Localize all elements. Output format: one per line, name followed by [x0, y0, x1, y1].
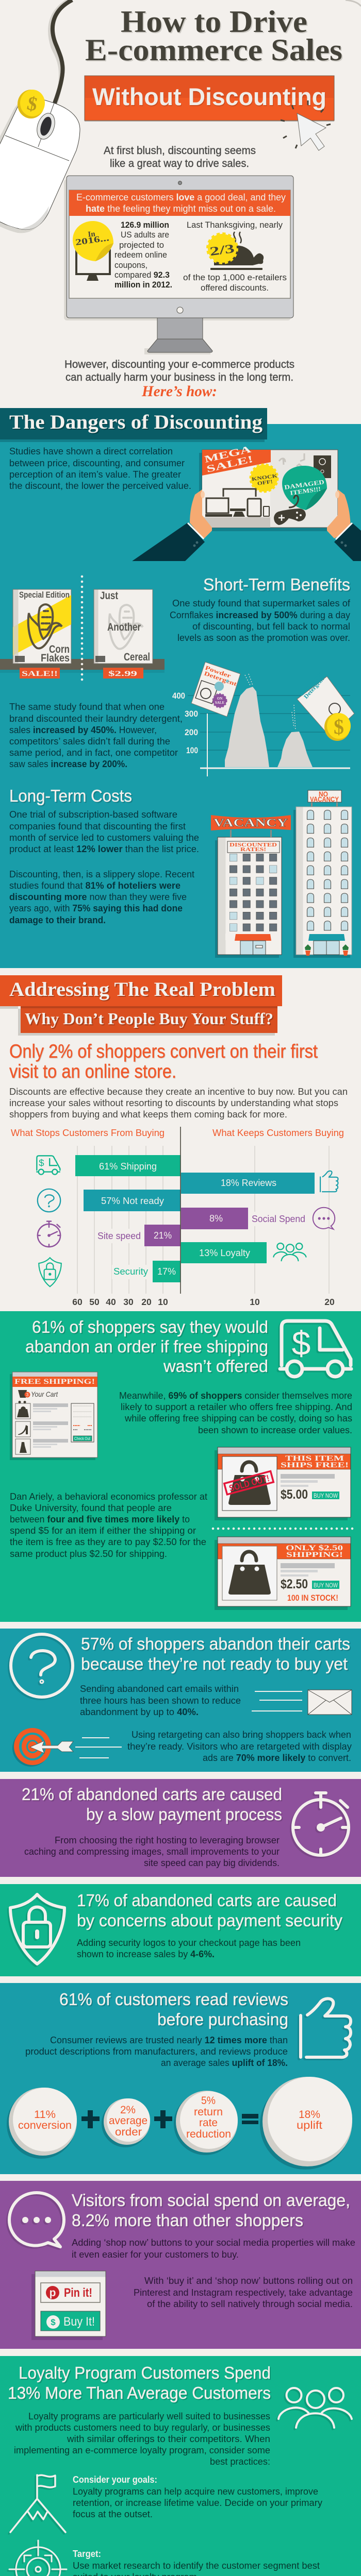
illustration: discount hotel	[211, 815, 291, 958]
illustration: full hotel: VACANCY	[310, 795, 339, 803]
transition text: can actually harm your business in the long term.	[65, 371, 293, 383]
button: pin it	[41, 2283, 100, 2302]
heading: real problem: Why Don’t People Buy Your Stuff?	[25, 1009, 273, 1028]
icon: mountain flag	[10, 2475, 65, 2532]
icon: coin: $	[334, 715, 344, 738]
stat: coupons: US adults are	[121, 230, 169, 240]
bar: loyalty	[181, 1242, 267, 1263]
text: shop now buttons: it even easier for your customers to buy.	[72, 2249, 239, 2260]
bar: security: 17%	[157, 1266, 176, 1277]
product card: ships free: BUY NOW	[314, 1492, 338, 1499]
stat: coupons: 126.9 million	[121, 221, 169, 230]
icon: people	[278, 2388, 352, 2428]
text: dan ariely: between four and five times more likely to	[10, 1514, 190, 1524]
headline: 17 percent	[77, 1891, 342, 1930]
text: 69 percent	[119, 1390, 352, 1435]
headline: social visitors: 8.2% more than other shoppers	[72, 2211, 303, 2230]
button: without discounting: Without Discounting	[92, 83, 326, 110]
chart: detergent sales: 200	[185, 727, 198, 737]
box: competitor detergent: Competitor	[298, 668, 325, 698]
text: laundry study	[9, 701, 183, 769]
text: software trial: product at least 12% lower than the list price.	[9, 843, 199, 854]
mockup: cart: FREE SHIPPING!	[14, 1378, 95, 1386]
text: discounts are effective	[9, 1086, 348, 1120]
stat: coupons: compared 92.3	[114, 270, 170, 280]
product card: ships free: $5.00	[281, 1487, 308, 1502]
text: laundry study: The same study found that when one	[9, 701, 165, 712]
text: software trial: month of service led to customers valuing the	[9, 832, 199, 843]
product card: paid shipping: SHIPPING!	[286, 1551, 343, 1559]
bar: site speed: Site speed	[97, 1231, 141, 1241]
bubble: return rate reduction: 5%	[201, 2095, 216, 2107]
text: site speed: caching and compressing images, small improvements to your	[24, 1846, 280, 1857]
illustration: hands holding sale magazine	[133, 444, 361, 561]
box: competitor detergent	[297, 668, 354, 737]
text: native selling	[134, 2275, 353, 2309]
mockup: social buttons	[31, 2271, 106, 2340]
text: discounts are effective: Discounts are effective because they create an incentive to buy now. But you can	[9, 1086, 348, 1097]
bubble: return rate reduction: rate	[199, 2117, 218, 2129]
monitor headline: E-commerce customers love a good deal, and they	[76, 192, 286, 202]
box: powder detergent: SALE	[215, 701, 224, 705]
bubble: average order: order	[115, 2126, 142, 2138]
title: How to Drive	[121, 5, 307, 39]
chart titles	[11, 1127, 344, 1138]
icon: question mark	[11, 1634, 73, 1697]
transition text: However, discounting your e-commerce products	[64, 359, 294, 370]
text: consider your goals: Consider your goals:	[73, 2474, 157, 2485]
axis labels	[72, 1297, 335, 1307]
text: dan ariely: Dan Ariely, a behavioral economics professor at	[10, 1491, 207, 1502]
headline: social visitors	[72, 2191, 350, 2230]
box: corn flakes	[13, 589, 71, 664]
text: abandoned cart emails: three hours has been shown to reduce	[80, 1695, 241, 1706]
headline: 2 percent: Only 2% of shoppers convert on their first	[9, 1041, 318, 1062]
box: corn flakes: Flakes	[41, 652, 70, 664]
text: abandoned cart emails: Sending abandoned cart emails within	[80, 1683, 239, 1694]
bubble: return rate reduction: reduction	[186, 2128, 231, 2140]
icon: truck small	[36, 1156, 60, 1175]
button: buy it: Buy It!	[63, 2315, 95, 2329]
illustration: hands holding sale magazine: OFF!	[257, 479, 273, 487]
text: consumer reviews	[25, 2035, 288, 2068]
text: loyalty intro	[14, 2411, 270, 2467]
text: target: Use market research to identify the customer segment best	[73, 2560, 320, 2571]
panel: loyalty	[0, 2356, 361, 2576]
text: laundry study: competitors’ sales didn’t fall during the	[9, 736, 170, 747]
headline: loyalty	[8, 2363, 271, 2402]
panel: free shipping	[0, 1311, 361, 1622]
text: slippery slope: damage to their brand.	[9, 914, 106, 925]
axis labels: 10	[158, 1297, 168, 1307]
product card: ships free: SHIPS FREE!	[281, 1461, 349, 1469]
button: buy it	[41, 2311, 100, 2331]
bubble: conversion: conversion	[18, 2120, 72, 2131]
text: consider your goals: retention, or increase lifetime value. Decide on your primary	[73, 2497, 323, 2508]
chart titles: What Keeps Customers Buying	[212, 1127, 344, 1138]
bar: social spend	[181, 1208, 306, 1229]
text: consumer reviews: product descriptions from manufacturers, and reviews produce	[25, 2046, 288, 2057]
headline: 61 percent	[25, 1317, 268, 1376]
text: loyalty intro: implementing an e-commerce loyalty program, consider some	[14, 2445, 270, 2455]
product card: ships free	[215, 1447, 351, 1520]
panel: reviews	[0, 1983, 361, 2174]
stat: coupons: redeem online	[114, 250, 167, 260]
headline: loyalty: Loyalty Program Customers Spend	[19, 2363, 271, 2382]
headline: 2 percent: visit to an online store.	[9, 1061, 176, 1082]
text: cornflakes study	[170, 598, 351, 643]
box: competitor detergent: Detergent	[303, 676, 325, 700]
text: cornflakes study: One study found that supermarket sales of	[172, 598, 351, 608]
headline: 61 percent: wasn’t offered	[163, 1357, 268, 1376]
text: site speed	[24, 1835, 280, 1868]
headline: 61 percent: 61% of shoppers say they would	[32, 1317, 268, 1336]
text: retargeting: Using retargeting can also bring shoppers back when	[132, 1729, 351, 1740]
bubble: average order: 2%	[120, 2104, 136, 2116]
text: retargeting: ads are 70% more likely to convert.	[203, 1752, 351, 1763]
text: target	[73, 2548, 320, 2576]
monitor headline	[76, 192, 286, 214]
transition text: Here’s how:	[141, 383, 217, 400]
product card: ships free: THIS ITEM	[285, 1454, 344, 1463]
bar: site speed: 21%	[154, 1230, 172, 1241]
mockup: cart: 3	[26, 1393, 29, 1397]
text: abandoned cart emails	[80, 1683, 241, 1717]
product card: paid shipping: ONLY $2.50	[286, 1544, 343, 1552]
illustration: discount hotel: VACANCY	[214, 816, 288, 829]
text: consider your goals: Loyalty programs can help acquire new customers, improve	[73, 2486, 318, 2497]
axis labels: 60	[72, 1297, 83, 1307]
text: discounts are effective: increase your sales without resorting to discounts by understanding what stops	[9, 1097, 338, 1108]
text: 69 percent: Meanwhile, 69% of shoppers consider themselves more	[119, 1390, 352, 1401]
price tag: 2.99	[103, 668, 143, 679]
stat: thanksgiving: of the top 1,000 e-retailers	[183, 273, 287, 282]
text: shop now buttons	[72, 2237, 355, 2260]
text: abandoned cart emails: abandonment by up to 40%.	[80, 1706, 199, 1717]
bubble: average order	[102, 2098, 150, 2147]
icon: sticker on small monitor: 2016...	[75, 233, 110, 247]
text: correlation: perception of an item’s value. The greater	[9, 469, 181, 480]
illustration: cereal shelf	[0, 577, 165, 681]
product card: paid shipping: 100 IN STOCK!	[287, 1593, 338, 1603]
icon: mouse with dollar coin	[0, 0, 361, 233]
text: consider your goals: focus at the outset.	[73, 2509, 153, 2519]
transition text	[64, 359, 294, 400]
headline: 57 percent: because they’re not ready to buy yet	[81, 1654, 348, 1673]
text: laundry study: brand discounted their laundry detergent,	[9, 713, 183, 724]
icon: stopwatch small	[38, 1222, 60, 1247]
illustration: hands holding sale magazine: DAMAGED	[284, 478, 325, 491]
bar: not ready	[84, 1190, 180, 1211]
chart titles: What Stops Customers From Buying	[11, 1127, 165, 1138]
text: 69 percent: likely to support a retailer who offers free shipping. And	[121, 1401, 352, 1412]
icon: truck	[280, 1321, 351, 1377]
text: laundry study: same period, and in fact, one competitor	[9, 747, 178, 758]
title: E-commerce Sales	[85, 33, 342, 67]
box: powder detergent: Powder	[204, 665, 232, 680]
panel: payment security	[0, 1884, 361, 1976]
axis labels: 50	[89, 1297, 100, 1307]
panel: slow payment	[0, 1779, 361, 1877]
axis labels: 20	[324, 1297, 335, 1307]
text: loyalty intro: Loyalty programs are particularly well suited to businesses	[28, 2411, 270, 2421]
text: correlation	[9, 446, 191, 491]
axis labels: 20	[141, 1297, 152, 1307]
text: 69 percent: while offering free shipping can be costly, doing so has	[124, 1413, 352, 1423]
icon: truck: $	[292, 1324, 310, 1362]
text: dan ariely: same product plus $2.50 for shipping.	[10, 1548, 167, 1559]
panel: social	[0, 2181, 361, 2349]
diverging bar chart	[11, 1127, 344, 1307]
section: dangers of discounting	[0, 408, 361, 968]
text: slippery slope: Discounting, then, is a slippery slope. Recent	[9, 869, 194, 879]
text: software trial: One trial of subscription-based software	[9, 809, 177, 820]
text: shop now buttons: Adding ‘shop now’ buttons to your social media properties will make	[72, 2237, 355, 2248]
product card: paid shipping	[215, 1537, 351, 1610]
text: cornflakes study: levels as soon as the promotion was over.	[177, 632, 350, 643]
icon: speech small	[313, 1208, 335, 1229]
text: slippery slope	[9, 869, 194, 925]
mockup: cart: Your Cart	[31, 1390, 58, 1398]
subheading: long-term costs: Long-Term Costs	[9, 786, 132, 805]
button: pin it: p	[50, 2287, 56, 2299]
bar: security: Security	[113, 1266, 148, 1277]
monitor	[64, 176, 293, 354]
price tag: sale	[20, 668, 60, 679]
icon: stopwatch	[293, 1793, 349, 1855]
bar: not ready: 57% Not ready	[101, 1196, 164, 1206]
bar: social spend: Social Spend	[252, 1214, 305, 1224]
illustration: hands holding sale magazine: SALE!	[205, 454, 254, 475]
intro text: like a great way to drive sales.	[110, 158, 249, 170]
mockup: cart	[10, 1372, 97, 1460]
headline: 61 percent reviews	[59, 1990, 288, 2029]
headline: 21 percent	[22, 1785, 282, 1824]
illustration: hands holding sale magazine: ITEMS!!!	[289, 485, 321, 497]
headline: 17 percent: by concerns about payment security	[77, 1911, 342, 1930]
box: powder detergent: ON	[217, 697, 222, 701]
text: loyalty intro: with similar offerings to their competitors. When	[67, 2433, 270, 2444]
headline: 61 percent reviews: before purchasing	[157, 2010, 288, 2029]
symbol: equals	[242, 2114, 258, 2124]
chart: detergent sales: 400	[172, 691, 185, 701]
illustration: hands holding sale magazine: KNOCK	[251, 473, 278, 482]
box: another cereal: Another	[107, 621, 141, 633]
price tag: sale: SALE!!	[22, 670, 58, 678]
illustration: discount hotel: DISCOUNTED	[229, 842, 277, 848]
icon: target	[9, 2540, 67, 2576]
equation: uplift	[7, 2077, 352, 2170]
box: corn flakes: Special Edition	[19, 590, 70, 600]
text: software trial	[9, 809, 199, 854]
bar: loyalty: 13% Loyalty	[199, 1248, 250, 1258]
bar: shipping: 61% Shipping	[99, 1161, 157, 1172]
heading: real problem	[0, 975, 282, 1036]
chart: detergent sales: 300	[185, 709, 198, 719]
bubble: average order: average	[109, 2115, 147, 2127]
heading: dangers: The Dangers of Discounting	[9, 411, 263, 433]
headline: 21 percent: 21% of abandoned carts are caused	[22, 1785, 282, 1804]
product card: ships free: SOLD OUT!	[228, 1473, 270, 1494]
text: dan ariely: spend $5 for an item if either the shipping or	[10, 1525, 196, 1536]
intro text: At first blush, discounting seems	[104, 145, 256, 157]
box: another cereal: Just	[100, 590, 118, 602]
text: site speed: site speed can pay big dividends.	[144, 1857, 280, 1868]
icon: turkey with burst: 2/3	[209, 242, 235, 259]
headline: loyalty: 13% More Than Average Customers	[8, 2383, 271, 2402]
bubble: return rate reduction	[174, 2091, 238, 2155]
text: dan ariely	[10, 1491, 207, 1559]
icon: shield	[10, 1894, 64, 1964]
text: native selling: With ‘buy it’ and ‘shop now’ buttons rolling out on	[144, 2275, 353, 2286]
illustration: full hotel: NO	[319, 790, 328, 798]
heading: dangers	[0, 408, 267, 442]
icon: thumbs up	[301, 1998, 351, 2057]
stat: coupons: coupons,	[114, 261, 147, 270]
bar: shipping	[75, 1155, 180, 1176]
text: security logos: shown to increase sales by 4-6%.	[77, 1948, 215, 1959]
subheading: short-term benefits: Short-Term Benefits	[203, 575, 350, 594]
bubble: uplift: 18%	[299, 2109, 320, 2121]
headline: 57 percent: 57% of shoppers abandon their carts	[81, 1634, 350, 1653]
mockup: cart: Check Out	[74, 1436, 91, 1441]
text: retargeting	[127, 1729, 352, 1763]
icon: sticker on small monitor	[73, 221, 113, 281]
text: consumer reviews: an average sales uplift of 18%.	[161, 2057, 288, 2068]
icon: mouse with dollar coin: $	[25, 92, 39, 115]
heading: real problem: Addressing The Real Problem	[9, 978, 275, 1001]
monitor headline: hate the feeling they might miss out on a sale.	[86, 204, 276, 214]
stat: thanksgiving: offered discounts.	[201, 283, 269, 293]
icon: sticker on small monitor: In	[88, 230, 96, 239]
headline: 57 percent	[81, 1634, 350, 1673]
text: target: Target:	[73, 2548, 101, 2559]
title	[85, 5, 342, 67]
stat: thanksgiving: Last Thanksgiving, nearly	[187, 220, 283, 230]
icon: target with arrow	[12, 1728, 122, 1767]
text: consider your goals	[73, 2474, 323, 2519]
text: slippery slope: years ago, with 75% saying this had done	[9, 903, 183, 913]
bubble: return rate reduction: return	[194, 2106, 223, 2118]
product card: paid shipping: $2.50	[281, 1577, 308, 1591]
headline: 2 percent	[9, 1041, 318, 1082]
icon: truck small: $	[39, 1158, 44, 1168]
box: another cereal	[94, 589, 153, 664]
icon: turkey with burst	[208, 232, 264, 270]
text: native selling: of the ability to sell natively through social media.	[147, 2298, 353, 2309]
button: buy it: $	[51, 2317, 56, 2327]
bubble: uplift: uplift	[297, 2120, 322, 2131]
text: retargeting: they’re ready. Visitors who are retargeted with display	[127, 1741, 352, 1752]
headline: 21 percent: by a slow payment process	[86, 1805, 282, 1824]
text: software trial: companies found that discounting the first	[9, 821, 186, 832]
illustration: hands holding sale magazine: MEGA	[203, 444, 252, 465]
text: cornflakes study: of discounting, but fell back to normal	[192, 621, 350, 632]
bar: security	[112, 1261, 180, 1282]
icon: shield small	[39, 1258, 61, 1286]
text: 69 percent: been shown to increase order values.	[198, 1425, 352, 1435]
icon: coin	[324, 713, 351, 741]
text: cornflakes study: Cornflakes increased by 500% during a day	[170, 609, 351, 620]
headline: 17 percent: 17% of abandoned carts are caused	[77, 1891, 337, 1910]
illustration: full hotel	[293, 790, 352, 958]
box: powder detergent	[191, 662, 240, 717]
chart: detergent sales: 100	[186, 745, 198, 755]
intro text	[104, 145, 256, 170]
text: native selling: Pinterest and Instagram respectively, take advantage	[134, 2287, 353, 2298]
text: site speed: From choosing the right hosting to leveraging browser	[55, 1835, 280, 1845]
text: dan ariely: the item is free as they are to pay $2.50 for the	[10, 1536, 206, 1547]
icon: cursor clicking	[281, 100, 331, 150]
box: corn flakes: Corn	[49, 643, 70, 655]
stat: coupons	[114, 221, 172, 290]
bubble: conversion	[7, 2088, 77, 2159]
chart: detergent sales	[172, 662, 354, 776]
button: without discounting	[85, 76, 334, 122]
bar: reviews	[181, 1173, 315, 1194]
axis labels: 40	[106, 1297, 116, 1307]
icon: thumb small	[320, 1171, 338, 1192]
button: pin it: Pin it!	[64, 2286, 92, 2300]
text: laundry study: sales increased by 450%. However,	[9, 724, 157, 735]
text: dan ariely: Duke University, found that people are	[10, 1502, 172, 1513]
price tag: 2.99: $2.99	[108, 670, 137, 678]
text: discounts are effective: shoppers from buying and what keeps them coming back for more.	[9, 1109, 287, 1120]
icon: people small	[273, 1243, 306, 1261]
illustration: discount hotel: RATES!	[240, 847, 266, 853]
panel: not ready to buy	[0, 1629, 361, 1772]
symbol: plus	[81, 2110, 100, 2128]
headline: 61 percent: abandon an order if free shipping	[25, 1337, 268, 1356]
text: security logos: Adding security logos to your checkout page has been	[77, 1937, 301, 1948]
axis labels: 30	[123, 1297, 134, 1307]
bar: site speed	[96, 1225, 180, 1246]
section: addressing the real problem	[0, 975, 348, 1307]
axis labels: 10	[250, 1297, 260, 1307]
text: loyalty intro: with products customers need to buy regularly, or businesses	[15, 2422, 270, 2433]
text: correlation: Studies have shown a direct correlation	[9, 446, 173, 456]
text: security logos	[77, 1937, 301, 1959]
headline: social visitors: Visitors from social spend on average,	[72, 2191, 350, 2210]
bar: reviews: 18% Reviews	[221, 1178, 276, 1188]
headline: 61 percent reviews: 61% of customers read reviews	[59, 1990, 288, 2009]
icon: flying envelope	[252, 1690, 352, 1715]
text: consumer reviews: Consumer reviews are trusted nearly 12 times more than	[50, 2035, 288, 2045]
text: slippery slope: discounting more now than they were five	[9, 891, 187, 902]
text: loyalty intro: best practices:	[210, 2456, 270, 2467]
bubble: conversion: 11%	[34, 2109, 56, 2121]
stat: thanksgiving	[183, 220, 287, 293]
product card: paid shipping: BUY NOW	[314, 1582, 338, 1589]
icon: speech bubble	[9, 2193, 64, 2247]
icon: question small	[38, 1189, 60, 1212]
bar: social spend: 8%	[209, 1213, 223, 1224]
text: slippery slope: studies found that 81% of hoteliers were	[9, 880, 180, 891]
stat: coupons: projected to	[119, 241, 164, 250]
bubble: uplift	[260, 2077, 352, 2170]
text: correlation: the discount, the lower the perceived value.	[9, 480, 191, 491]
box: another cereal: Cereal	[124, 651, 150, 663]
text: laundry study: saw sales increase by 200%.	[9, 758, 127, 769]
stat: coupons: million in 2012.	[114, 280, 172, 290]
text: correlation: between price, discounting, and consumer	[9, 457, 185, 468]
symbol: plus	[154, 2110, 172, 2128]
box: powder detergent: Detergent	[203, 670, 238, 687]
